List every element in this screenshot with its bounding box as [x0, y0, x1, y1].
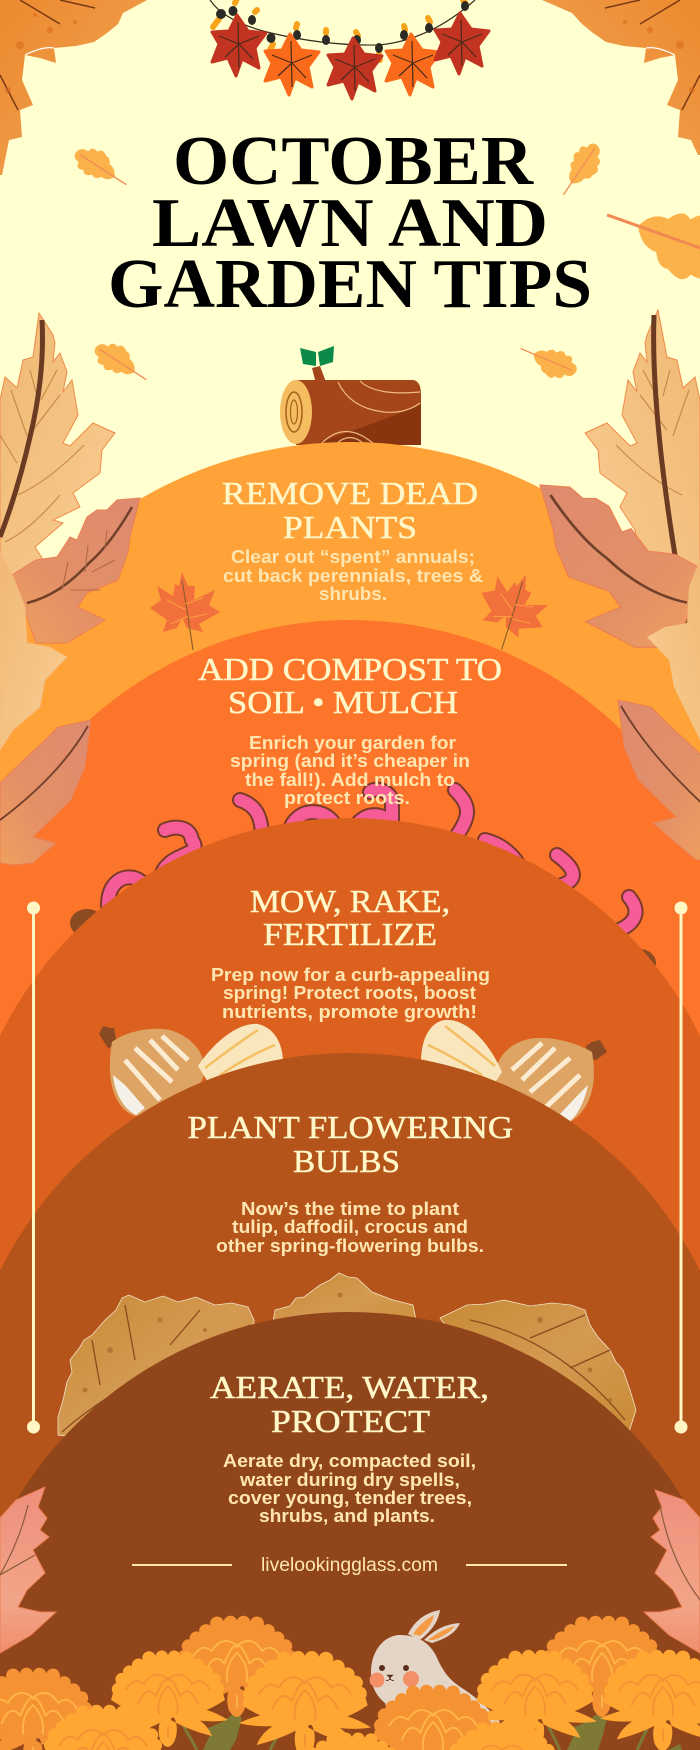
- icon: maple leaf right: [463, 561, 560, 661]
- icon: log with sprout: [280, 346, 421, 445]
- icon: onions right: [421, 1020, 607, 1122]
- small falling leaves: [69, 137, 700, 391]
- decorative vertical line: right: [674, 902, 688, 1434]
- text block: mow rake fertilize: FERTILIZE: [263, 916, 437, 952]
- text block: aerate water protect: shrubs, and plants.: [259, 1506, 435, 1526]
- panel: aerate water protect arch: [0, 1312, 700, 1750]
- worms: [70, 790, 656, 977]
- panel: mow rake fertilize arch: [0, 818, 700, 1750]
- decorative vertical line: left: [27, 902, 40, 1434]
- text block: remove dead plants: PLANTS: [283, 509, 417, 545]
- big leaves: right side: [540, 310, 700, 860]
- text block: aerate water protect: water during dry spells,: [239, 1470, 460, 1490]
- text block: plant flowering bulbs: tulip, daffodil, crocus and: [232, 1217, 468, 1237]
- text block: plant flowering bulbs: Now’s the time to plant: [241, 1199, 459, 1219]
- text block: aerate water protect: Aerate dry, compacted soil,: [223, 1451, 476, 1471]
- text block: add compost: ADD COMPOST TO: [198, 651, 502, 687]
- title: [108, 123, 592, 323]
- text block: add compost: the fall!). Add mulch to: [245, 770, 455, 790]
- text block: remove dead plants: shrubs.: [319, 584, 387, 604]
- title: GARDEN TIPS: [108, 246, 592, 323]
- text block: mow rake fertilize: [211, 883, 490, 1022]
- lower pink leaf left: [0, 1487, 56, 1653]
- text block: aerate water protect: PROTECT: [271, 1403, 431, 1439]
- panel: add compost arch: [0, 620, 700, 1750]
- title: OCTOBER: [173, 123, 534, 200]
- text block: aerate water protect: cover young, tender trees,: [228, 1488, 472, 1508]
- footer with website: livelookingglass.com: [261, 1555, 438, 1576]
- text block: remove dead plants: REMOVE DEAD: [222, 475, 478, 511]
- text block: mow rake fertilize: Prep now for a curb-appealing: [211, 965, 490, 985]
- text block: plant flowering bulbs: PLANT FLOWERING: [188, 1109, 513, 1145]
- text block: remove dead plants: Clear out “spent” annuals;: [231, 547, 475, 567]
- text block: aerate water protect: [210, 1369, 489, 1526]
- text block: add compost: spring (and it’s cheaper in: [230, 751, 470, 771]
- text block: plant flowering bulbs: [188, 1109, 513, 1256]
- corner leaf: top right: [542, 0, 700, 155]
- text block: mow rake fertilize: nutrients, promote growth!: [222, 1002, 477, 1022]
- leaf garland with lights: [210, 0, 489, 99]
- text block: add compost: SOIL • MULCH: [228, 684, 458, 720]
- lower pink leaf right: [644, 1490, 700, 1653]
- text block: mow rake fertilize: MOW, RAKE,: [250, 883, 450, 919]
- panel: remove dead plants arch: [0, 442, 700, 1750]
- icon: rabbit: [370, 1610, 500, 1750]
- text block: remove dead plants: [222, 475, 483, 604]
- corner leaf: top left: [0, 0, 147, 175]
- text block: add compost: Enrich your garden for: [249, 733, 456, 753]
- text block: mow rake fertilize: spring! Protect roots, boost: [223, 983, 476, 1003]
- panel: plant flowering bulbs arch: [0, 1053, 700, 1750]
- text block: add compost: [198, 651, 502, 808]
- text block: plant flowering bulbs: other spring-flowering bulbs.: [216, 1236, 484, 1256]
- icon: onions left: [99, 1024, 283, 1116]
- text block: remove dead plants: cut back perennials, trees &: [223, 566, 483, 586]
- icon: maple leaf left: [150, 572, 220, 650]
- text block: add compost: protect roots.: [284, 788, 410, 808]
- text block: plant flowering bulbs: BULBS: [293, 1143, 400, 1179]
- title: LAWN AND: [152, 185, 548, 262]
- marigold flowers: [0, 1616, 700, 1750]
- text block: aerate water protect: AERATE, WATER,: [210, 1369, 489, 1405]
- big leaves: left side: [0, 313, 140, 865]
- icon: dried leaves: [58, 1273, 636, 1440]
